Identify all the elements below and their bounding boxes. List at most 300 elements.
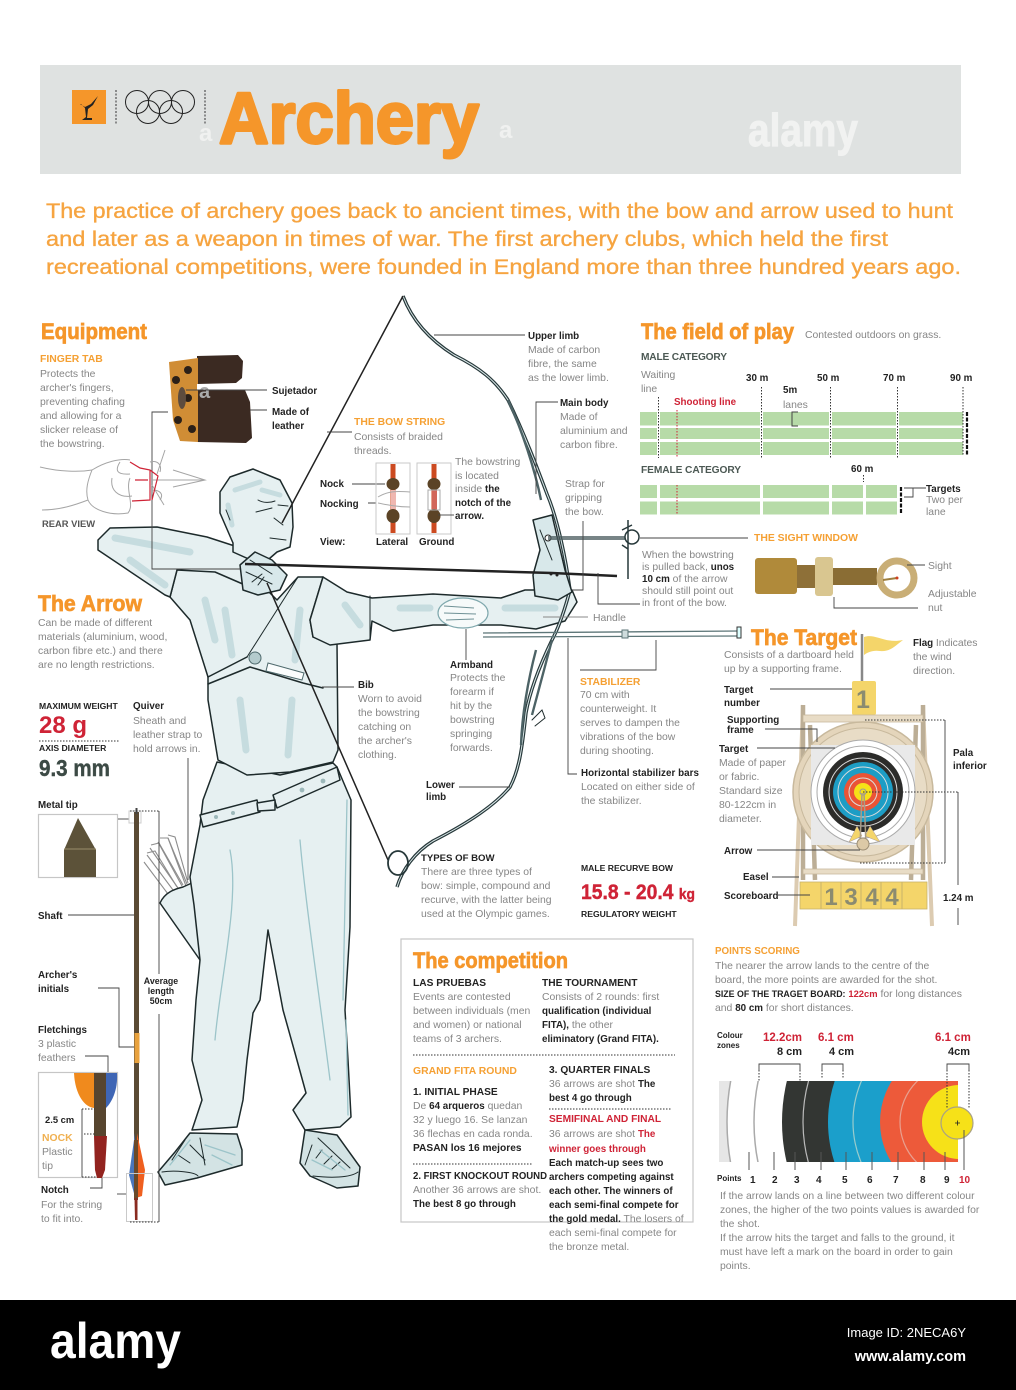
text: grand fita round: 36 flechas en cada ronda. — [413, 1129, 533, 1140]
male labels: 30 m — [746, 373, 769, 384]
target text — [724, 638, 977, 677]
text: scoring notes: points. — [720, 1261, 751, 1272]
arrow diagram: feathers — [38, 1053, 76, 1064]
centre ring — [941, 1107, 973, 1139]
text: scoring notes: must have left a mark on the board in order to gain — [720, 1247, 953, 1258]
panel: bow string: arrow. — [455, 511, 484, 522]
target labels: Target — [724, 685, 754, 696]
inset: nock photo — [38, 1072, 118, 1178]
text: points scoring: The nearer the arrow lands to the centre of the — [715, 961, 930, 972]
arrow in target — [849, 826, 880, 842]
panel: bow string: Ground — [419, 537, 454, 548]
target dimensions: inferior — [953, 761, 987, 772]
label: male category: MALE CATEGORY — [641, 352, 727, 363]
callout: armband: springing — [450, 729, 492, 740]
quiver arrows — [144, 835, 188, 894]
text: the tournament: Consists of 2 rounds: first — [542, 992, 659, 1003]
heading: the competition: The competition — [413, 948, 568, 973]
panel: bow string: Nock — [320, 479, 345, 490]
text: points scoring: SIZE OF THE TRAGET BOARD: 122cm for long distances — [715, 988, 962, 1000]
points scale: 3 — [794, 1175, 800, 1186]
icon: olympic games logo — [72, 90, 205, 124]
zone labels: 4 cm — [829, 1046, 854, 1058]
intro text: and later as a weapon in times of war. The first archery clubs, which held the first — [46, 227, 888, 251]
text: scoring notes: the shot. — [720, 1219, 760, 1230]
target labels: Arrow — [724, 846, 753, 857]
points scale — [717, 1174, 971, 1186]
panel: bow string: View: — [320, 537, 345, 548]
text: grand fita round: 1. INITIAL PHASE — [413, 1087, 498, 1098]
text: quarter finals: best 4 go through — [549, 1093, 632, 1104]
bowstring — [267, 296, 403, 860]
text: the tournament — [542, 978, 659, 1045]
male lanes — [640, 387, 967, 458]
panel: the target — [719, 625, 987, 926]
callout: strap — [565, 479, 605, 590]
drawing hand — [240, 552, 287, 595]
female lanes — [640, 464, 964, 518]
text: finger tab: preventing chafing — [40, 397, 125, 408]
inset: nock photo: Plastic — [42, 1147, 73, 1158]
callout: bib: Bib — [358, 680, 374, 691]
text: points scoring: board, the more points are awarded for the shot. — [715, 975, 937, 986]
text: semifinal and final: SEMIFINAL AND FINAL — [549, 1114, 661, 1125]
callout: quiver: Sheath and — [133, 716, 186, 727]
zone labels: 12.2cm — [763, 1032, 802, 1044]
zone labels: zones — [717, 1041, 740, 1050]
shoe left — [158, 1133, 242, 1185]
title: Archery — [219, 79, 479, 159]
callout: handle — [543, 613, 626, 624]
callout: bib — [322, 680, 422, 761]
text: finger tab: Protects the — [40, 369, 96, 380]
male labels: lanes — [783, 400, 808, 411]
scoreboard: 4 — [885, 884, 899, 911]
callout: bib: Worn to avoid — [358, 694, 422, 705]
panel: bow string: notch of the — [455, 498, 512, 509]
panel: sight window: When the bowstring — [642, 550, 734, 561]
callout: bib: the bowstring — [358, 708, 420, 719]
text: finger tab: slicker release of — [40, 425, 118, 436]
text: semifinal and final: archers competing against — [549, 1172, 674, 1183]
male labels: 50 m — [817, 373, 840, 384]
header banner: a — [199, 120, 213, 147]
panel: field of play — [640, 319, 973, 518]
points scale: Points — [717, 1174, 742, 1183]
armband — [438, 598, 488, 628]
male labels: line — [641, 384, 657, 395]
bow limb outline — [397, 296, 570, 887]
points scale: 2 — [772, 1175, 778, 1186]
text: quarter finals — [549, 1065, 672, 1109]
scoreboard: 4 — [865, 884, 879, 911]
text: the tournament: FITA), the other — [542, 1020, 613, 1031]
target dimensions: Pala — [953, 748, 974, 759]
panel: sight window: nut — [928, 603, 943, 614]
text: points scoring — [715, 946, 962, 1014]
heading: the target: The Target — [751, 625, 858, 650]
intro text: The practice of archery goes back to ancient times, with the bow and arrow used to hunt — [46, 199, 953, 223]
target labels: Target — [719, 744, 749, 755]
points scale: 6 — [867, 1175, 873, 1186]
text: types of bow: used at the Olympic games. — [421, 909, 550, 920]
target labels: Standard size — [719, 786, 783, 797]
text: scoring notes — [720, 1191, 980, 1272]
face features — [226, 482, 288, 540]
inset: nock photo: tip — [42, 1161, 53, 1172]
text: semifinal and final — [548, 1114, 684, 1253]
callout: stabilizer: vibrations of the bow — [580, 732, 676, 743]
text: arrow description: are no length restrictions. — [38, 660, 155, 671]
male labels: 70 m — [883, 373, 906, 384]
panel: bow string: THE BOW STRING — [354, 417, 445, 428]
panel: bow string: inside the — [455, 484, 500, 495]
text: grand fita round: 32 y luego 16. Se lanzan — [413, 1115, 528, 1126]
finger tab labels — [152, 386, 317, 569]
callout: upper limb: Upper limb — [528, 331, 579, 342]
callout: armband: forearm if — [450, 687, 494, 698]
panel: bow string: The bowstring — [455, 457, 520, 468]
scoreboard — [800, 882, 927, 911]
inset: nock photo: NOCK — [42, 1133, 73, 1144]
text: scoring notes: If the arrow lands on a line between two different colour — [720, 1191, 975, 1202]
callout: armband: hit by the — [450, 701, 492, 712]
header banner — [40, 65, 961, 174]
callout: stabilizer: 70 cm with — [580, 690, 630, 701]
bib — [208, 577, 323, 688]
text: semifinal and final: each semi-final compete for — [549, 1228, 677, 1239]
callout: lower limb: limb — [426, 792, 446, 803]
target labels: Easel — [743, 872, 769, 883]
text: semifinal and final: the bronze metal. — [549, 1242, 629, 1253]
footer band: www.alamy.com — [854, 1349, 966, 1365]
text: arrow description — [38, 618, 167, 671]
panel: the competition — [401, 939, 693, 1253]
text: finger tab: the bowstring. — [40, 439, 105, 450]
callout: quiver: hold arrows in. — [133, 744, 201, 755]
rear arm shading — [115, 538, 190, 585]
intro text — [46, 199, 961, 279]
male labels: Shooting line — [674, 397, 737, 408]
text: las pruebas: teams of 3 archers. — [413, 1034, 502, 1045]
callout: quiver: Quiver — [133, 701, 164, 712]
arrow diagram: Archer's — [38, 970, 78, 981]
text: points scoring: POINTS SCORING — [715, 946, 800, 957]
female lanes: Targets — [926, 484, 961, 495]
target text: up by a supporting frame. — [724, 664, 842, 675]
icon: flag and number: 1 — [856, 686, 870, 714]
callout: notch — [41, 1178, 102, 1225]
stat: male recurve bow: 15.8 - 20.4 kg — [581, 881, 695, 904]
heading: field of play: The field of play — [641, 319, 795, 344]
panel: sight window — [598, 533, 977, 614]
stat: maximum weight — [39, 701, 119, 739]
panel: sight window: in front of the bow. — [642, 598, 727, 609]
arrow diagram: Metal tip — [38, 800, 78, 811]
rear arm — [98, 527, 262, 597]
callout: lower limb: Lower — [426, 780, 455, 791]
target labels: diameter. — [719, 814, 762, 825]
arrow diagram: length — [148, 986, 174, 996]
text: finger tab: FINGER TAB — [40, 354, 103, 365]
panel: bow string — [320, 417, 520, 548]
male labels: Waiting — [641, 370, 675, 381]
panel: sight window: is pulled back, unos — [642, 562, 735, 573]
zone labels: 8 cm — [777, 1046, 802, 1058]
sleeve hem — [369, 596, 371, 640]
arrow diagram: Fletchings — [38, 1025, 88, 1036]
female lanes: lane — [926, 507, 946, 518]
callout: main body: Main body — [560, 398, 609, 409]
callout: stabilizer — [580, 640, 680, 757]
finger tab labels: Made of — [272, 407, 310, 418]
inset: nock photo: 2.5 cm — [45, 1114, 74, 1125]
stat: maximum weight: 28 g — [39, 712, 87, 739]
header banner: a — [499, 117, 513, 144]
sight bar — [548, 537, 625, 539]
target text: the wind — [913, 652, 952, 663]
footer band: Image ID: 2NECA6Y — [847, 1325, 966, 1340]
points scale: 8 — [920, 1175, 926, 1186]
photo: finger tab — [169, 355, 252, 443]
label: female category: FEMALE CATEGORY — [641, 465, 741, 476]
target labels: or fabric. — [719, 772, 759, 783]
target labels — [719, 685, 860, 902]
text: las pruebas: and women) or national — [413, 1020, 522, 1031]
text: grand fita round — [413, 1066, 547, 1210]
text: arrow description: materials (aluminium, wood, — [38, 632, 167, 643]
torso shading — [205, 600, 300, 755]
callout: bib: clothing. — [358, 750, 397, 761]
icon: hand with tab rear view: REAR VIEW — [42, 518, 95, 529]
text: las pruebas: LAS PRUEBAS — [413, 978, 486, 989]
callout: strap: gripping — [565, 493, 602, 504]
intro text: recreational competitions, were founded in England more than three hundred years ago. — [46, 255, 961, 279]
bow riser — [532, 515, 572, 726]
stat: male recurve bow: REGULATORY WEIGHT — [581, 909, 677, 919]
male labels: 90 m — [950, 373, 973, 384]
callout: upper limb: Made of carbon — [528, 345, 600, 356]
text: types of bow: bow: simple, compound and — [421, 881, 551, 892]
heading: equipment: Equipment — [41, 319, 148, 344]
icon: flag and number — [852, 634, 903, 715]
text: arrow description: carbon fibre etc.) and there — [38, 646, 163, 657]
text: finger tab: archer's fingers, — [40, 383, 114, 394]
target labels: number — [724, 698, 760, 709]
footer band — [0, 1300, 1016, 1390]
text: semifinal and final: winner goes through — [548, 1144, 646, 1155]
panel: sight window: Sight — [928, 561, 952, 572]
photo: finger tab: a — [199, 381, 211, 403]
callout: strap: Strap for — [565, 479, 605, 490]
text: semifinal and final: 36 arrows are shot The — [549, 1129, 656, 1140]
target labels: Supporting — [727, 715, 779, 726]
trousers — [190, 762, 351, 1130]
belt — [200, 767, 340, 827]
callout: stabilizer: serves to dampen the — [580, 718, 680, 729]
callout: bib: the archer's — [358, 736, 412, 747]
callout: quiver: leather strap to — [133, 730, 203, 741]
female lanes: Two per — [926, 495, 964, 506]
scoreboard: 3 — [844, 884, 858, 911]
target easel and board — [793, 705, 933, 926]
callout: main body — [536, 398, 628, 494]
text: grand fita round: 2. FIRST KNOCKOUT ROUND — [413, 1171, 547, 1182]
text: semifinal and final: each semi-final compete for — [549, 1200, 679, 1211]
text: the tournament: THE TOURNAMENT — [542, 978, 638, 989]
arrow diagram: 3 plastic — [38, 1039, 76, 1050]
zone labels: Colour — [717, 1031, 743, 1040]
points scale: 7 — [893, 1175, 899, 1186]
callout: horizontal stabilizer bars — [568, 638, 700, 807]
text: grand fita round: GRAND FITA ROUND — [413, 1066, 517, 1077]
arrow diagram: Shaft — [38, 911, 63, 922]
icon: hand with tab rear view — [40, 450, 205, 529]
callout: stabilizer: during shooting. — [580, 746, 654, 757]
points scale: 4 — [816, 1175, 822, 1186]
stat: maximum weight: MAXIMUM WEIGHT — [39, 701, 119, 711]
text: types of bow — [421, 853, 552, 920]
target labels: 80-122cm in — [719, 800, 776, 811]
callout: handle: Handle — [593, 613, 626, 624]
target labels: Scoreboard — [724, 891, 778, 902]
zone labels: 6.1 cm — [818, 1032, 854, 1044]
text: grand fita round: Another 36 arrows are shot. — [413, 1185, 541, 1196]
points scale: 9 — [944, 1175, 950, 1186]
callout: main body: Made of — [560, 412, 598, 423]
callout: horizontal stabilizer bars: the stabilizer. — [581, 796, 642, 807]
callout: strap: the bow. — [565, 507, 604, 518]
panel: sight window: 10 cm of the arrow — [642, 574, 728, 585]
bow limb reinforcement — [508, 400, 552, 745]
text: points scoring: and 80 cm for short distances. — [715, 1003, 854, 1014]
callout: bib: catching on — [358, 722, 411, 733]
arrow diagram — [38, 800, 178, 1222]
callout: armband: Armband — [450, 660, 493, 671]
callout: main body: aluminium and — [560, 426, 628, 437]
text: finger tab — [40, 354, 125, 450]
panel: bow string: Nocking — [320, 499, 359, 510]
bow nock loop — [388, 851, 408, 875]
text: scoring notes: zones, the higher of the two points values is awarded for — [720, 1205, 980, 1216]
target labels: frame — [727, 725, 754, 736]
text: types of bow: TYPES OF BOW — [421, 853, 496, 864]
text: arrow description: Can be made of different — [38, 618, 152, 629]
scoreboard: 1 — [824, 884, 838, 911]
text: las pruebas — [413, 978, 530, 1045]
points scale: 5 — [842, 1175, 848, 1186]
finger tab labels: Sujetador — [272, 386, 317, 397]
arrow diagram: Average — [144, 976, 178, 986]
shoe right — [300, 1130, 360, 1188]
stabilizer rod — [483, 627, 741, 638]
callout: armband: Protects the — [450, 673, 506, 684]
text: quarter finals: 3. QUARTER FINALS — [549, 1065, 651, 1076]
quiver — [160, 882, 200, 960]
chart: colour zones — [717, 1032, 974, 1183]
female lanes: 60 m — [851, 464, 874, 475]
text: finger tab: and allowing for a — [40, 411, 122, 422]
footer band: alamy — [50, 1313, 181, 1369]
torso — [170, 556, 338, 775]
stat: axis diameter — [39, 741, 119, 781]
callout: upper limb: as the lower limb. — [528, 373, 609, 384]
text: semifinal and final: Each match-up sees two — [549, 1158, 663, 1169]
text: grand fita round: De 64 arqueros quedan — [413, 1101, 522, 1112]
text: semifinal and final: each other. The winners of — [549, 1186, 673, 1197]
panel: bow string: threads. — [354, 446, 392, 457]
callout: notch: to fit into. — [41, 1214, 83, 1225]
panel: bow string: is located — [455, 471, 499, 482]
text: quarter finals: 36 arrows are shot The — [549, 1079, 656, 1090]
text: types of bow: There are three types of — [421, 867, 532, 878]
front arm — [310, 577, 577, 645]
male labels: 5m — [783, 385, 797, 396]
callout: horizontal stabilizer bars: Located on either side of — [581, 782, 695, 793]
panel: bow string: Lateral — [376, 537, 408, 548]
head and neck — [220, 469, 293, 565]
stat: male recurve bow — [581, 863, 695, 919]
callout: armband: bowstring — [450, 715, 495, 726]
text: semifinal and final: the gold medal. The losers of — [549, 1214, 684, 1225]
trouser shading — [215, 800, 348, 1115]
arm shading — [345, 605, 555, 625]
arrow diagram: initials — [38, 984, 70, 995]
arrow diagram: 50cm — [150, 996, 172, 1006]
panel: sight window: Adjustable — [928, 589, 977, 600]
zone labels — [717, 1031, 971, 1058]
target labels: Made of paper — [719, 758, 787, 769]
callout: armband — [450, 629, 506, 754]
archer figure — [98, 469, 577, 1188]
text: the tournament: eliminatory (Grand FITA). — [542, 1034, 659, 1045]
target text: direction. — [913, 666, 955, 677]
zone labels: 6.1 cm — [935, 1032, 971, 1044]
callout: main body: carbon fibre. — [560, 440, 618, 451]
target dimensions: 1.24 m — [943, 893, 974, 904]
text: scoring notes: If the arrow hits the target and falls to the ground, it — [720, 1233, 955, 1244]
callout: notch: For the string — [41, 1200, 102, 1211]
colour bands — [719, 1081, 958, 1162]
icon: sight photo — [755, 557, 914, 596]
stat: male recurve bow: MALE RECURVE BOW — [581, 863, 674, 873]
callout: upper limb: fibre, the same — [528, 359, 597, 370]
callout: stabilizer: STABILIZER — [580, 677, 641, 688]
subheading: Contested outdoors on grass. — [805, 330, 941, 341]
points scale: 1 — [750, 1175, 756, 1186]
panel: bow string: Consists of braided — [354, 432, 443, 443]
header banner: alamy — [748, 104, 858, 156]
text: types of bow: recurve, with the latter being — [421, 895, 552, 906]
callout: armband: forwards. — [450, 743, 493, 754]
points scale: 10 — [959, 1175, 971, 1186]
text: las pruebas: between individuals (men — [413, 1006, 530, 1017]
stat: axis diameter: AXIS DIAMETER — [39, 743, 107, 753]
male labels — [641, 370, 973, 411]
icon: sight — [622, 520, 639, 579]
arrow shaft on bow — [245, 564, 617, 576]
stat: axis diameter: 9.3 mm — [39, 755, 110, 781]
callout: quiver — [133, 701, 203, 880]
zone labels: 4cm — [948, 1046, 970, 1058]
text: the tournament: qualification (individual — [542, 1006, 652, 1017]
bow — [245, 296, 741, 887]
callout: horizontal stabilizer bars: Horizontal stabilizer bars — [581, 768, 700, 779]
text: grand fita round: The best 8 go through — [413, 1199, 516, 1210]
target dimensions — [860, 720, 987, 925]
callout: notch: Notch — [41, 1185, 69, 1196]
panel: sight window: THE SIGHT WINDOW — [754, 533, 858, 544]
